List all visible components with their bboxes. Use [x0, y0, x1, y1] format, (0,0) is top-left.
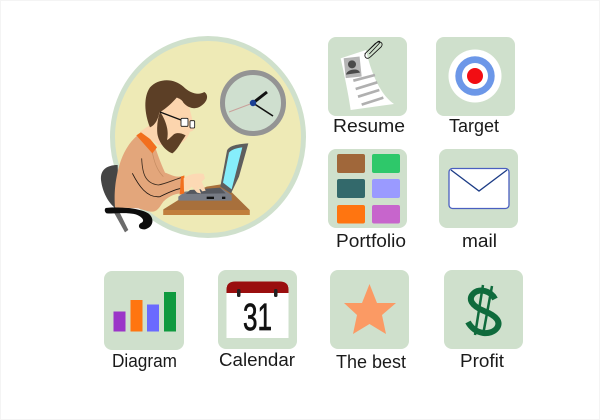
label: The best [336, 352, 406, 372]
tile: Calendar [218, 270, 297, 370]
icon: wall clock [222, 72, 284, 134]
bar chart [114, 292, 176, 332]
tile: Portfolio [328, 149, 407, 251]
icon: envelope [449, 168, 509, 208]
label: mail [462, 231, 497, 251]
hand [184, 174, 206, 193]
illustration: man working at laptop in circle [101, 38, 304, 236]
chair [101, 165, 152, 232]
background circle [112, 38, 304, 236]
desk [163, 184, 250, 215]
hair [145, 80, 207, 127]
label: Diagram [112, 351, 177, 371]
icon: target [448, 50, 502, 102]
label: Resume [333, 116, 405, 136]
glasses [160, 112, 195, 128]
icon: calendar page: 31 [243, 297, 272, 339]
neck and face [140, 93, 194, 145]
tile: Profit [444, 270, 523, 371]
beard [157, 112, 186, 153]
label: Profit [460, 351, 504, 371]
label: Target [449, 116, 499, 136]
label: Portfolio [336, 231, 406, 251]
laptop [178, 143, 248, 201]
man figure and desk, drawn in 3x zoom coordinates [101, 80, 250, 232]
torso and arm [115, 131, 184, 212]
tile: Target [436, 37, 515, 136]
tile: Diagram [104, 271, 184, 371]
icon: dollar sign [468, 285, 498, 335]
icon: star [344, 284, 396, 334]
icon: colour swatches [337, 154, 400, 224]
tile: Resume [328, 37, 407, 136]
label: Calendar [219, 350, 295, 370]
tile: The best [330, 270, 409, 372]
tile: mail [439, 149, 518, 251]
icon: resume sheet with paperclip [341, 41, 394, 110]
